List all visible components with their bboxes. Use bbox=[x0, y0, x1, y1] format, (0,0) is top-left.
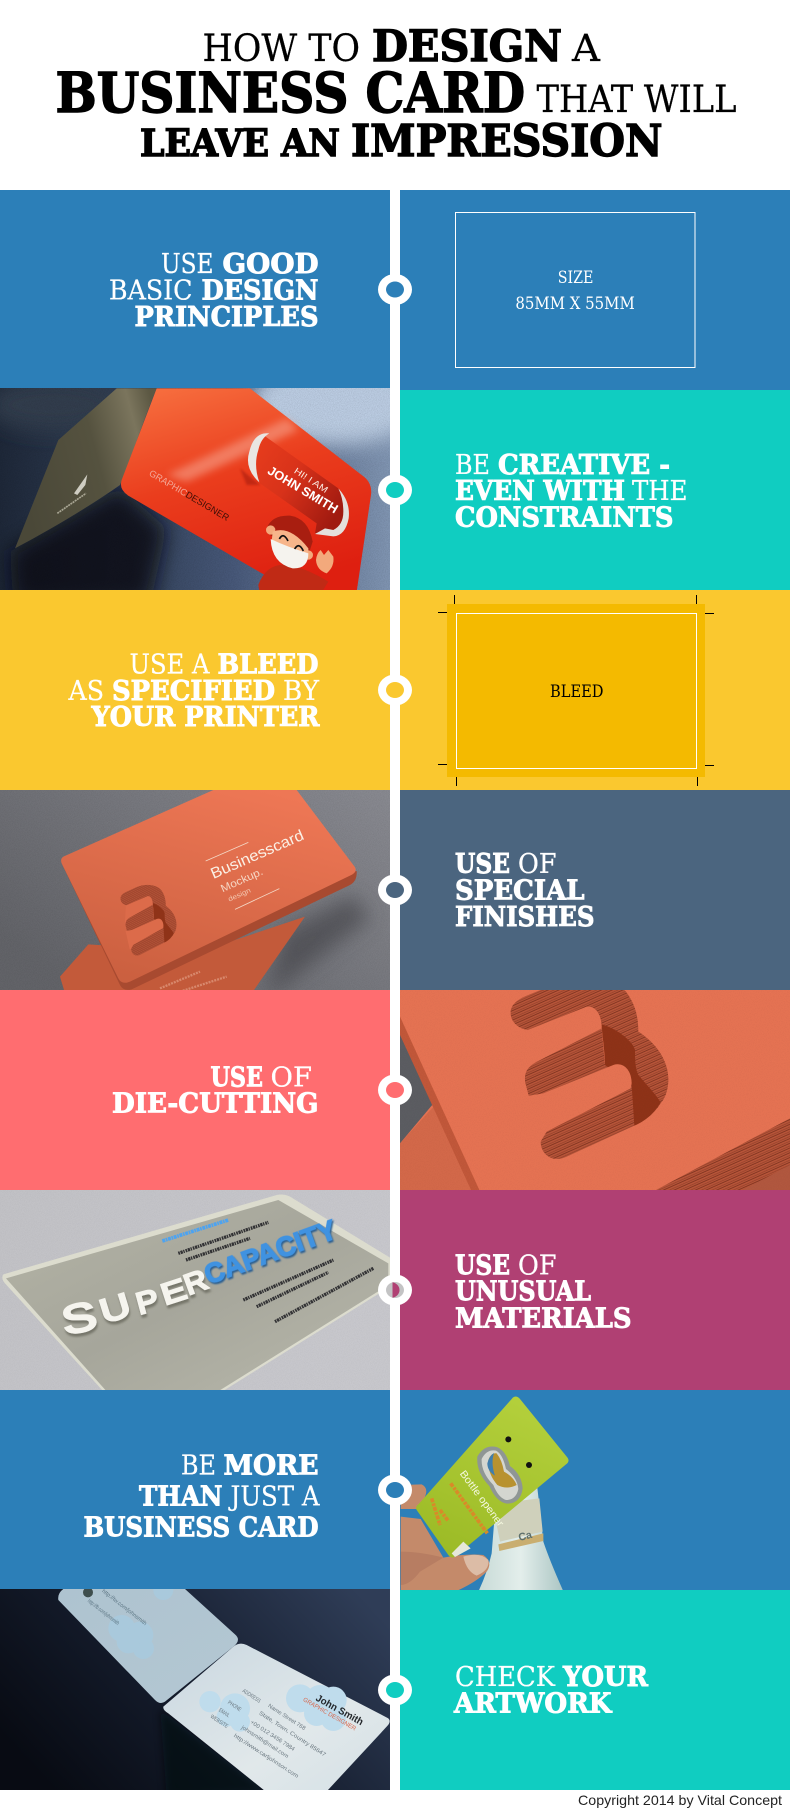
photo: folded white card on dark background: http://tw.com/johnsmith bbox=[100, 1589, 147, 1627]
photo: folded white card on dark background: John Smith bbox=[314, 1693, 365, 1728]
heading: unusual materials: MATERIALS bbox=[455, 1302, 632, 1334]
photo: orange stacked cards bbox=[0, 785, 390, 998]
heading: be creative: BE bbox=[455, 449, 490, 481]
title: THAT WILL bbox=[536, 78, 736, 121]
card bbox=[416, 1397, 569, 1558]
title: A bbox=[571, 27, 601, 70]
heading: more than a card: MORE bbox=[224, 1450, 318, 1482]
heading: special finishes: OF bbox=[518, 848, 556, 880]
node 2 bbox=[378, 474, 412, 506]
panel: be creative even with the constraints bbox=[400, 390, 790, 590]
heading: be creative bbox=[455, 449, 688, 534]
title: IMPRESSION bbox=[351, 116, 662, 167]
title: HOW TO bbox=[202, 27, 360, 70]
photo: translucent plastic card: CAPACITY bbox=[200, 1213, 341, 1290]
title: DESIGN bbox=[372, 22, 562, 72]
photo: folded white card on dark background: State, Town, Country 85647 bbox=[258, 1711, 327, 1758]
heading: use a bleed: BY bbox=[283, 675, 320, 707]
heading: use a bleed bbox=[68, 648, 321, 733]
node 8 bbox=[378, 1674, 412, 1706]
photo: folded white card on dark background: EMAIL bbox=[217, 1708, 231, 1719]
photo: red glossy card with cartoon: HI! I AM bbox=[292, 466, 330, 495]
photo: translucent plastic card bbox=[0, 1185, 390, 1395]
panel: bottle opener card photo: Bottle opener bbox=[457, 1469, 506, 1530]
heading: check your artwork: ARTWORK bbox=[453, 1688, 613, 1720]
panel: bleed diagram bbox=[400, 590, 790, 790]
heading: use a bleed: SPECIFIED bbox=[112, 675, 275, 707]
panel: business card size diagram bbox=[400, 190, 790, 390]
heading: use a bleed: YOUR PRINTER bbox=[91, 701, 321, 733]
node 6 bbox=[378, 1274, 412, 1306]
heading: die-cutting: USE bbox=[210, 1062, 263, 1094]
heading: more than a card: THAN bbox=[139, 1480, 222, 1512]
heading: unusual materials: OF bbox=[518, 1250, 556, 1282]
embossed word: SUPER: P bbox=[132, 1282, 162, 1321]
heading: more than a card: BUSINESS CARD bbox=[84, 1512, 318, 1544]
panel: be more than just a business card bbox=[0, 1390, 390, 1589]
heading: use a bleed: BLEED bbox=[218, 648, 318, 680]
photo: folded white card on dark background: Name Street 768 bbox=[267, 1703, 306, 1732]
panel: use of unusual materials bbox=[400, 1190, 790, 1390]
photo: folded white card on dark background: ADDRESS bbox=[241, 1688, 262, 1705]
heading: unusual materials: USE bbox=[455, 1250, 510, 1282]
photo: red glossy card with cartoon: JOHN SMITH bbox=[265, 464, 340, 516]
heading: more than a card: JUST A bbox=[228, 1480, 321, 1512]
heading: use good basic design principles: USE bbox=[161, 248, 214, 280]
embossed word: SUPER: U bbox=[95, 1286, 135, 1330]
bleed area bbox=[447, 604, 705, 777]
copyright: Copyright 2014 by Vital Concept bbox=[578, 1792, 782, 1808]
heading: check your artwork: YOUR bbox=[562, 1661, 649, 1693]
heading: check your artwork bbox=[453, 1661, 649, 1720]
panel: use of die-cutting bbox=[0, 990, 390, 1190]
photo: folded white card on dark background: http://www.carljohnson.com bbox=[232, 1733, 300, 1780]
heading: use a bleed: AS bbox=[68, 675, 104, 707]
heading: more than a card: BE bbox=[181, 1450, 216, 1482]
photo: red glossy card with cartoon: GRAPHICDESIGNER bbox=[147, 468, 231, 523]
size label bbox=[515, 268, 635, 314]
title: BUSINESS CARD bbox=[56, 60, 525, 125]
heading: be creative: THE bbox=[632, 475, 688, 507]
heading: be creative: CONSTRAINTS bbox=[455, 502, 674, 534]
heading: unusual materials: UNUSUAL bbox=[455, 1276, 591, 1308]
photo: orange stacked cards: design bbox=[227, 887, 252, 903]
heading: use a bleed: USE A bbox=[130, 648, 210, 680]
heading: special finishes bbox=[455, 848, 594, 933]
photo: folded white card on dark background: PHONE bbox=[226, 1700, 242, 1713]
panel: use a bleed as specified by your printer bbox=[0, 590, 390, 790]
crop marks bbox=[438, 595, 714, 786]
bleed label: BLEED bbox=[550, 682, 604, 702]
heading: use good basic design principles bbox=[109, 248, 318, 333]
size label: 85MM X 55MM bbox=[515, 294, 635, 314]
photo: folded white card on dark background: +00 012 3456 7984 bbox=[249, 1720, 296, 1753]
panel: bottle opener card photo bbox=[400, 1390, 790, 1595]
heading: use good basic design principles: GOOD bbox=[222, 248, 318, 280]
photo: orange stacked cards: Mockup. bbox=[219, 866, 265, 895]
node 4 bbox=[378, 874, 412, 906]
heading: more than a card bbox=[84, 1450, 321, 1544]
node 5 bbox=[378, 1074, 412, 1106]
node 1 bbox=[378, 274, 412, 305]
node 3 bbox=[378, 674, 412, 706]
title: LEAVE AN bbox=[140, 121, 340, 165]
panel: bottle opener card photo: Ca bbox=[517, 1529, 533, 1544]
photo: folded white card on dark background: WEBSITE bbox=[209, 1714, 229, 1730]
panel: use of special finishes bbox=[400, 790, 790, 990]
heading: special finishes: SPECIAL bbox=[455, 874, 584, 906]
photo: folded white card on dark background: http://fb.com/johnsmith bbox=[86, 1599, 120, 1627]
embossed word: SUPER: E bbox=[157, 1273, 190, 1312]
heading: use good basic design principles: DESIGN bbox=[202, 274, 318, 306]
heading: unusual materials bbox=[455, 1250, 632, 1334]
heading: die-cutting bbox=[112, 1062, 318, 1120]
photo: folded white card on dark background bbox=[0, 1580, 390, 1798]
photo: red glossy card with cartoon bbox=[0, 358, 423, 605]
timeline: center line with nodes bbox=[378, 190, 412, 1790]
icon: cartoon character bbox=[258, 516, 334, 595]
heading: use good basic design principles: PRINCIPLES bbox=[134, 301, 318, 333]
heading: be creative: CREATIVE - bbox=[498, 449, 670, 481]
embossed word: SUPER: S bbox=[57, 1292, 101, 1343]
heading: die-cutting: OF bbox=[270, 1062, 312, 1094]
trim line bbox=[456, 614, 696, 768]
heading: check your artwork: CHECK bbox=[455, 1661, 555, 1693]
photo: orange stacked cards: Businesscard bbox=[208, 827, 307, 883]
title bbox=[56, 22, 736, 167]
heading: special finishes: USE bbox=[455, 848, 510, 880]
photo: die-cut card close-up bbox=[400, 978, 790, 1195]
heading: be creative: EVEN WITH bbox=[455, 475, 625, 507]
size outline bbox=[456, 212, 695, 368]
embossed word: SUPER: R bbox=[180, 1264, 212, 1301]
photo: folded white card on dark background: johnsmith@mail.com bbox=[239, 1724, 290, 1760]
panel: use good basic design principles bbox=[0, 190, 390, 388]
photo: folded white card on dark background: GRAPHIC DESIGNER bbox=[302, 1697, 357, 1733]
embossed word: SUPER bbox=[63, 1270, 212, 1338]
heading: die-cutting: DIE-CUTTING bbox=[112, 1088, 318, 1120]
node 7 bbox=[378, 1474, 412, 1506]
size label: SIZE bbox=[558, 268, 593, 288]
hand bbox=[401, 1484, 489, 1595]
bottle bbox=[479, 1488, 563, 1590]
heading: special finishes: FINISHES bbox=[455, 901, 594, 933]
panel: check your artwork bbox=[400, 1590, 790, 1790]
heading: use good basic design principles: BASIC bbox=[109, 274, 192, 306]
